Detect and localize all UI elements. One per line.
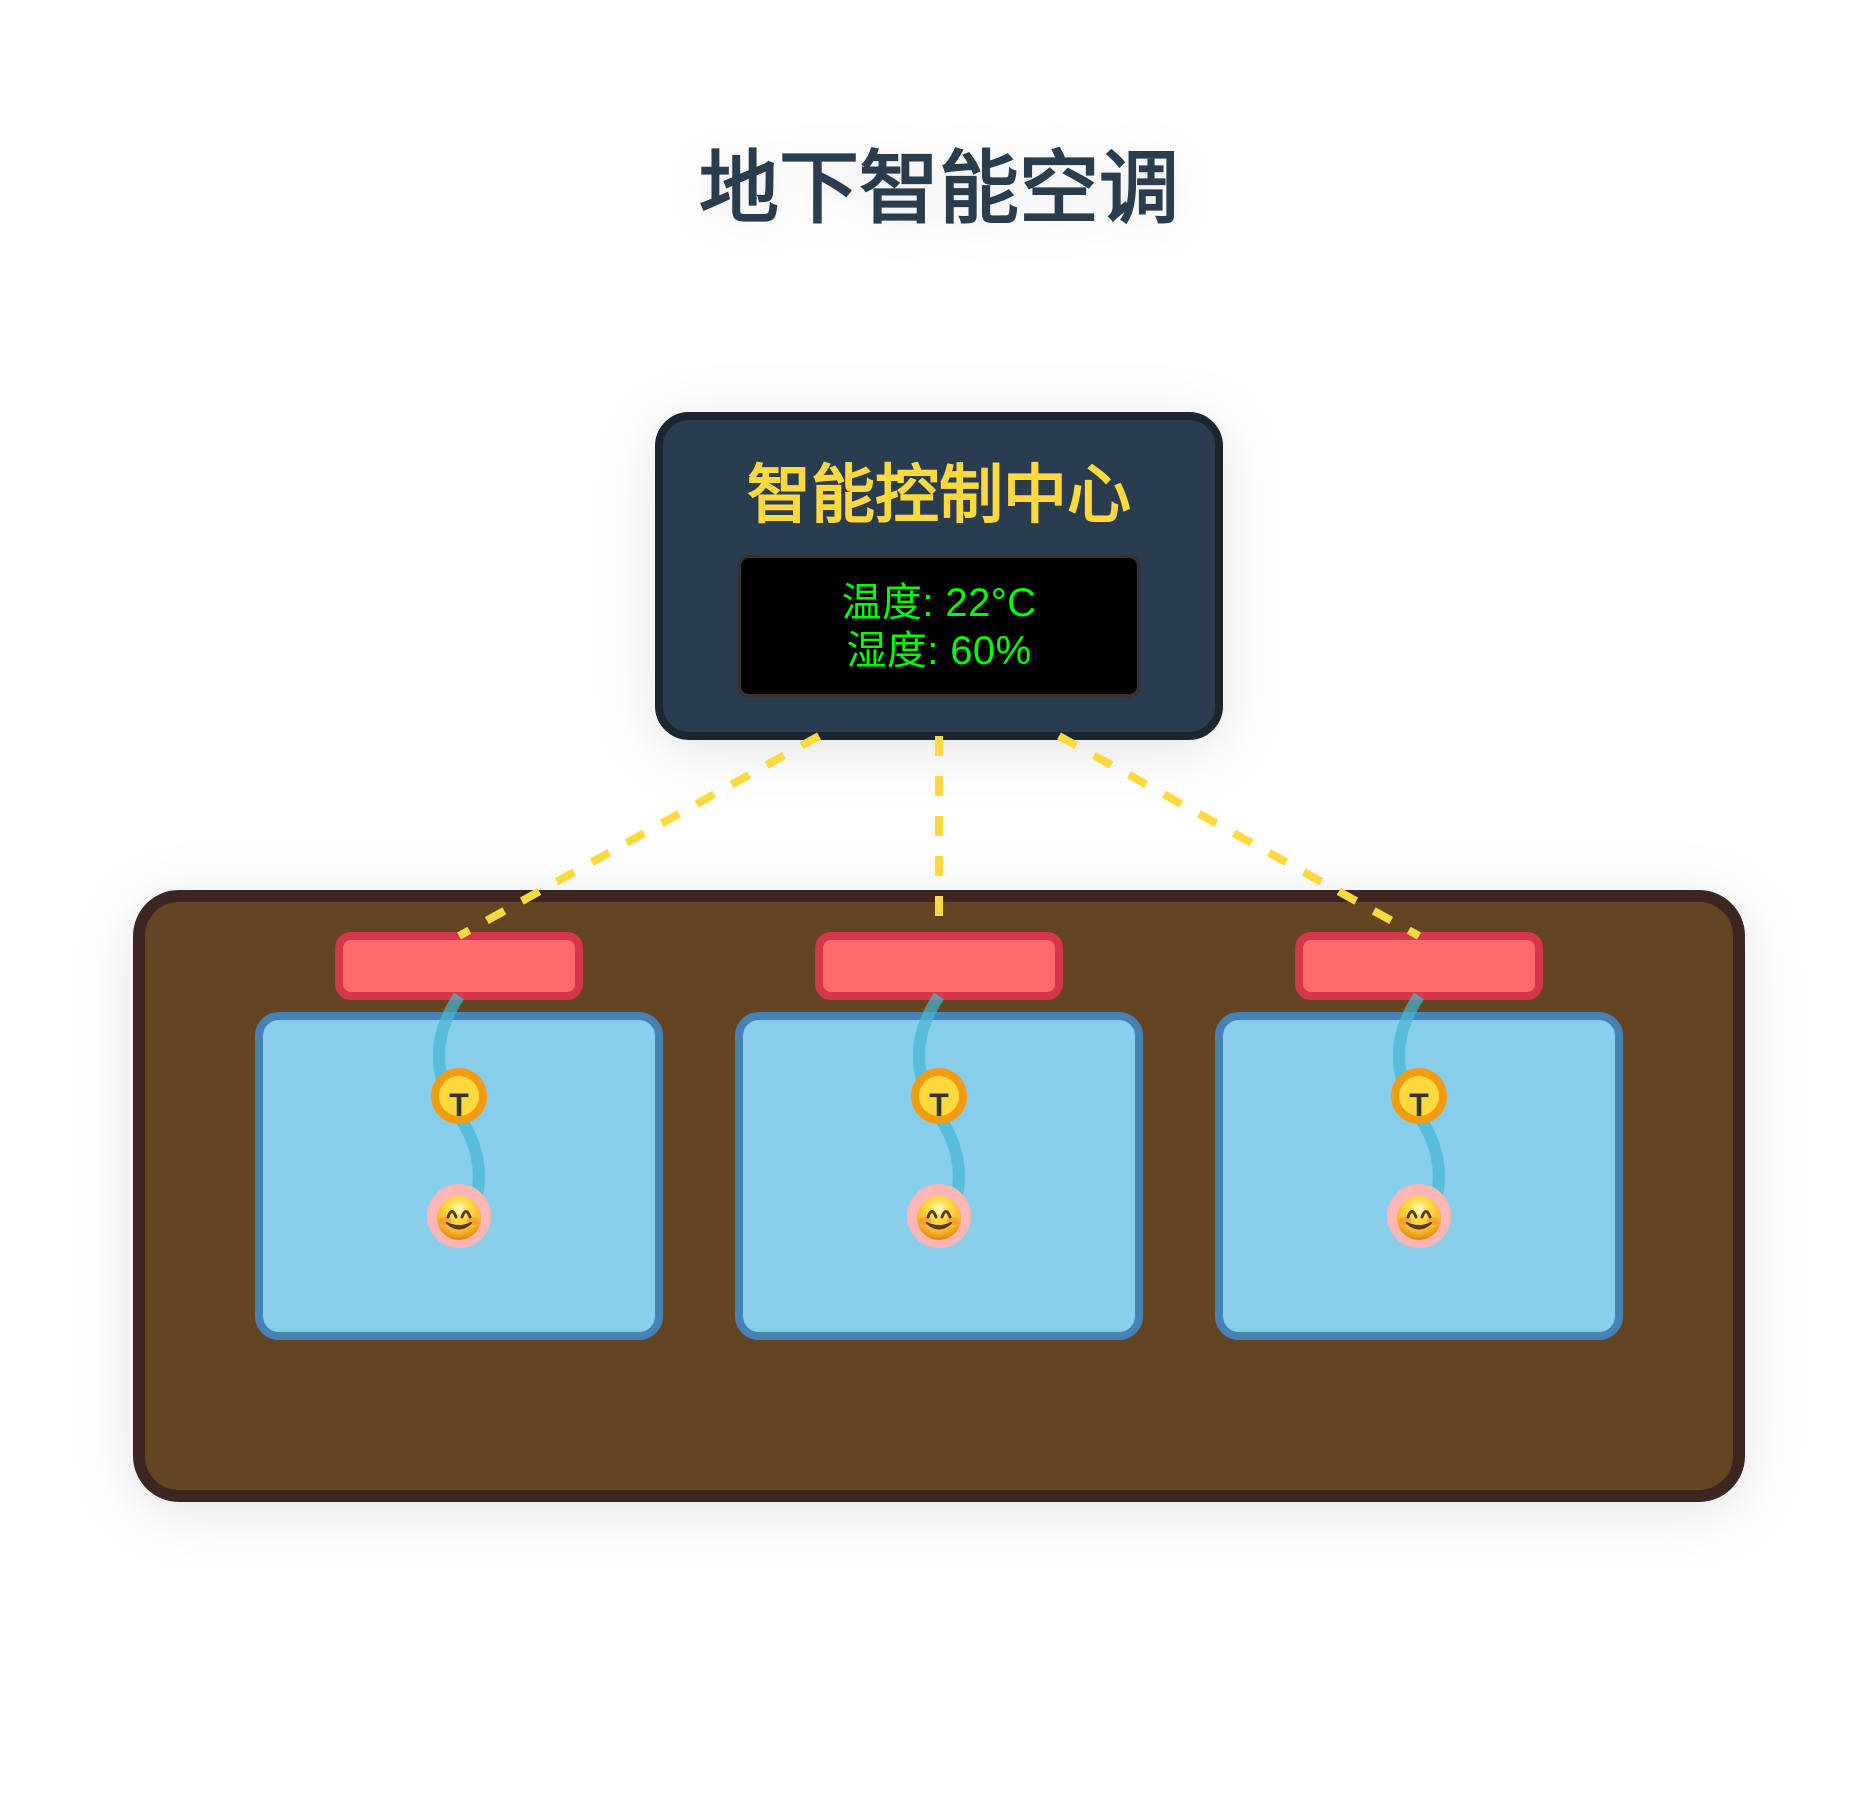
air conditioner unit 3: [1299, 936, 1539, 996]
arrow: control line to unit 1: [459, 736, 819, 936]
display screen: [739, 556, 1139, 696]
person 3: [1387, 1184, 1451, 1248]
room 2: [739, 936, 1139, 1336]
air flow pipe 3: [1399, 996, 1439, 1236]
air conditioner unit 1: [339, 936, 579, 996]
title: 地下智能空调: [699, 144, 1179, 233]
air flow pipe 1: [439, 996, 479, 1236]
sensor 2: [915, 1072, 963, 1123]
temperature reading: 温度: 22°C: [842, 581, 1036, 625]
sensor 3: [1395, 1072, 1443, 1123]
arrow: control line to unit 2: [935, 736, 943, 916]
air conditioner unit 2: [819, 936, 1059, 996]
sensor 2: T: [929, 1087, 949, 1123]
person 1: [427, 1184, 491, 1248]
humidity reading: 湿度: 60%: [846, 629, 1032, 673]
room 3: [1219, 936, 1619, 1336]
panel: smart control center: [659, 416, 1219, 736]
panel: underground ground block: [139, 896, 1739, 1496]
air flow pipe 2: [919, 996, 959, 1236]
sensor 3: T: [1409, 1087, 1429, 1123]
arrow: control line to unit 3: [1059, 736, 1419, 936]
sensor 1: T: [449, 1087, 469, 1123]
heading: control center: 智能控制中心: [747, 459, 1131, 531]
sensor 1: [435, 1072, 483, 1123]
room 1: [259, 936, 659, 1336]
person 2: [907, 1184, 971, 1248]
